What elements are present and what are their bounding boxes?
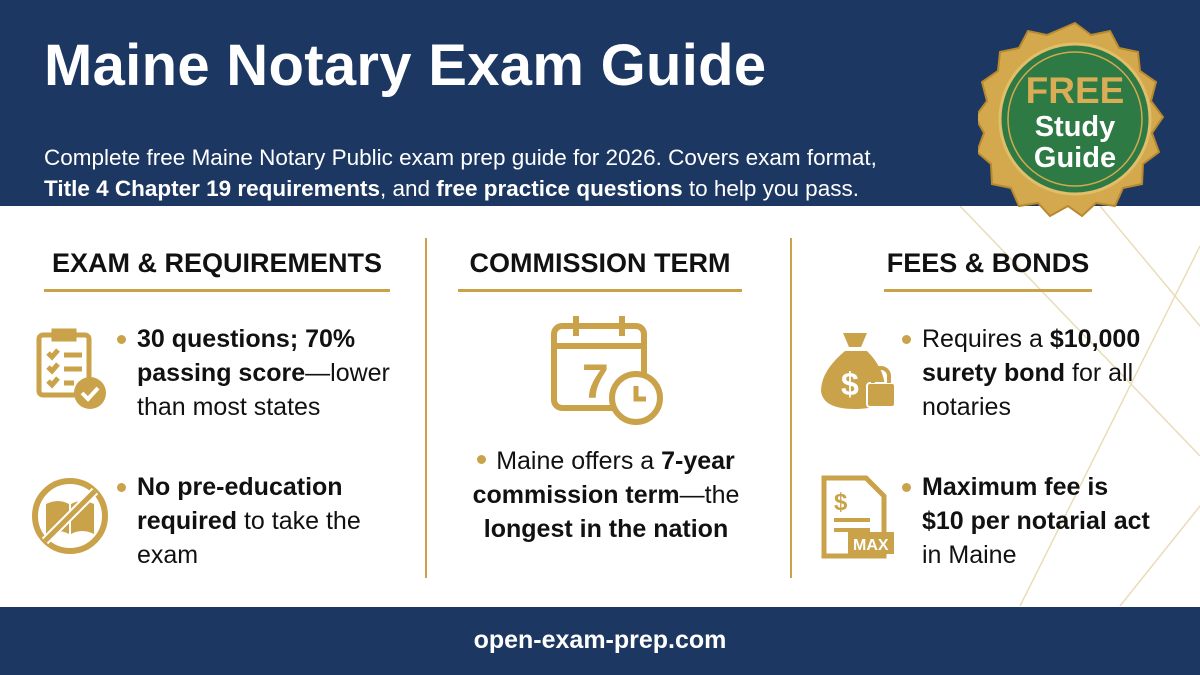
- text: 7-year term: [446, 444, 766, 546]
- icon: calendar 7: [551, 316, 663, 425]
- icon: max fee doc: [822, 476, 894, 558]
- icon: max fee doc: $: [834, 489, 848, 516]
- text: 7-year term: longest in the nation: [484, 515, 728, 543]
- badge: [978, 22, 1164, 218]
- icon: clipboard: [36, 328, 106, 409]
- badge: FREE: [1026, 70, 1124, 111]
- badge: Study: [1035, 111, 1115, 143]
- text: 30 questions: 30 questions; 70% passing score—lower than most states: [137, 325, 390, 421]
- text: max fee: Maximum fee is: [922, 473, 1108, 501]
- heading: fees & bonds: [884, 248, 1092, 292]
- heading: exam & requirements: [44, 248, 390, 292]
- icon: calendar 7: 7: [582, 356, 609, 409]
- footer: [0, 607, 1200, 675]
- text: 7-year term: commission term—the: [473, 481, 739, 509]
- heading: fees & bonds: FEES & BONDS: [887, 248, 1089, 278]
- icon: money bag: $: [841, 366, 859, 402]
- text: no pre-education: No pre-education required to take the exam: [137, 473, 361, 569]
- subtitle: Complete free Maine Notary Public exam prep guide for 2026. Covers exam format,: [44, 145, 877, 170]
- icon: money bag: [821, 333, 894, 409]
- text: max fee: $10 per notarial act in Maine: [922, 507, 1150, 569]
- text: max fee: [922, 470, 1162, 572]
- footer: open-exam-prep.com: [474, 626, 726, 654]
- title: Maine Notary Exam Guide: [44, 33, 766, 98]
- text: 7-year term: Maine offers a 7-year: [496, 447, 735, 475]
- text: surety bond: Requires a $10,000 surety bond for all notaries: [922, 325, 1140, 421]
- badge: Guide: [1034, 142, 1116, 174]
- heading: commission term: COMMISSION TERM: [470, 248, 730, 278]
- header band: [0, 0, 1200, 206]
- decorative lines: [960, 206, 1200, 606]
- subtitle: Title 4 Chapter 19 requirements, and free practice questions to help you pass.: [44, 176, 859, 201]
- icon: no book: [32, 478, 108, 554]
- heading: exam & requirements: EXAM & REQUIREMENTS: [52, 248, 382, 278]
- heading: commission term: [458, 248, 742, 292]
- subtitle: [44, 145, 877, 201]
- icon: max fee doc: MAX: [853, 537, 889, 554]
